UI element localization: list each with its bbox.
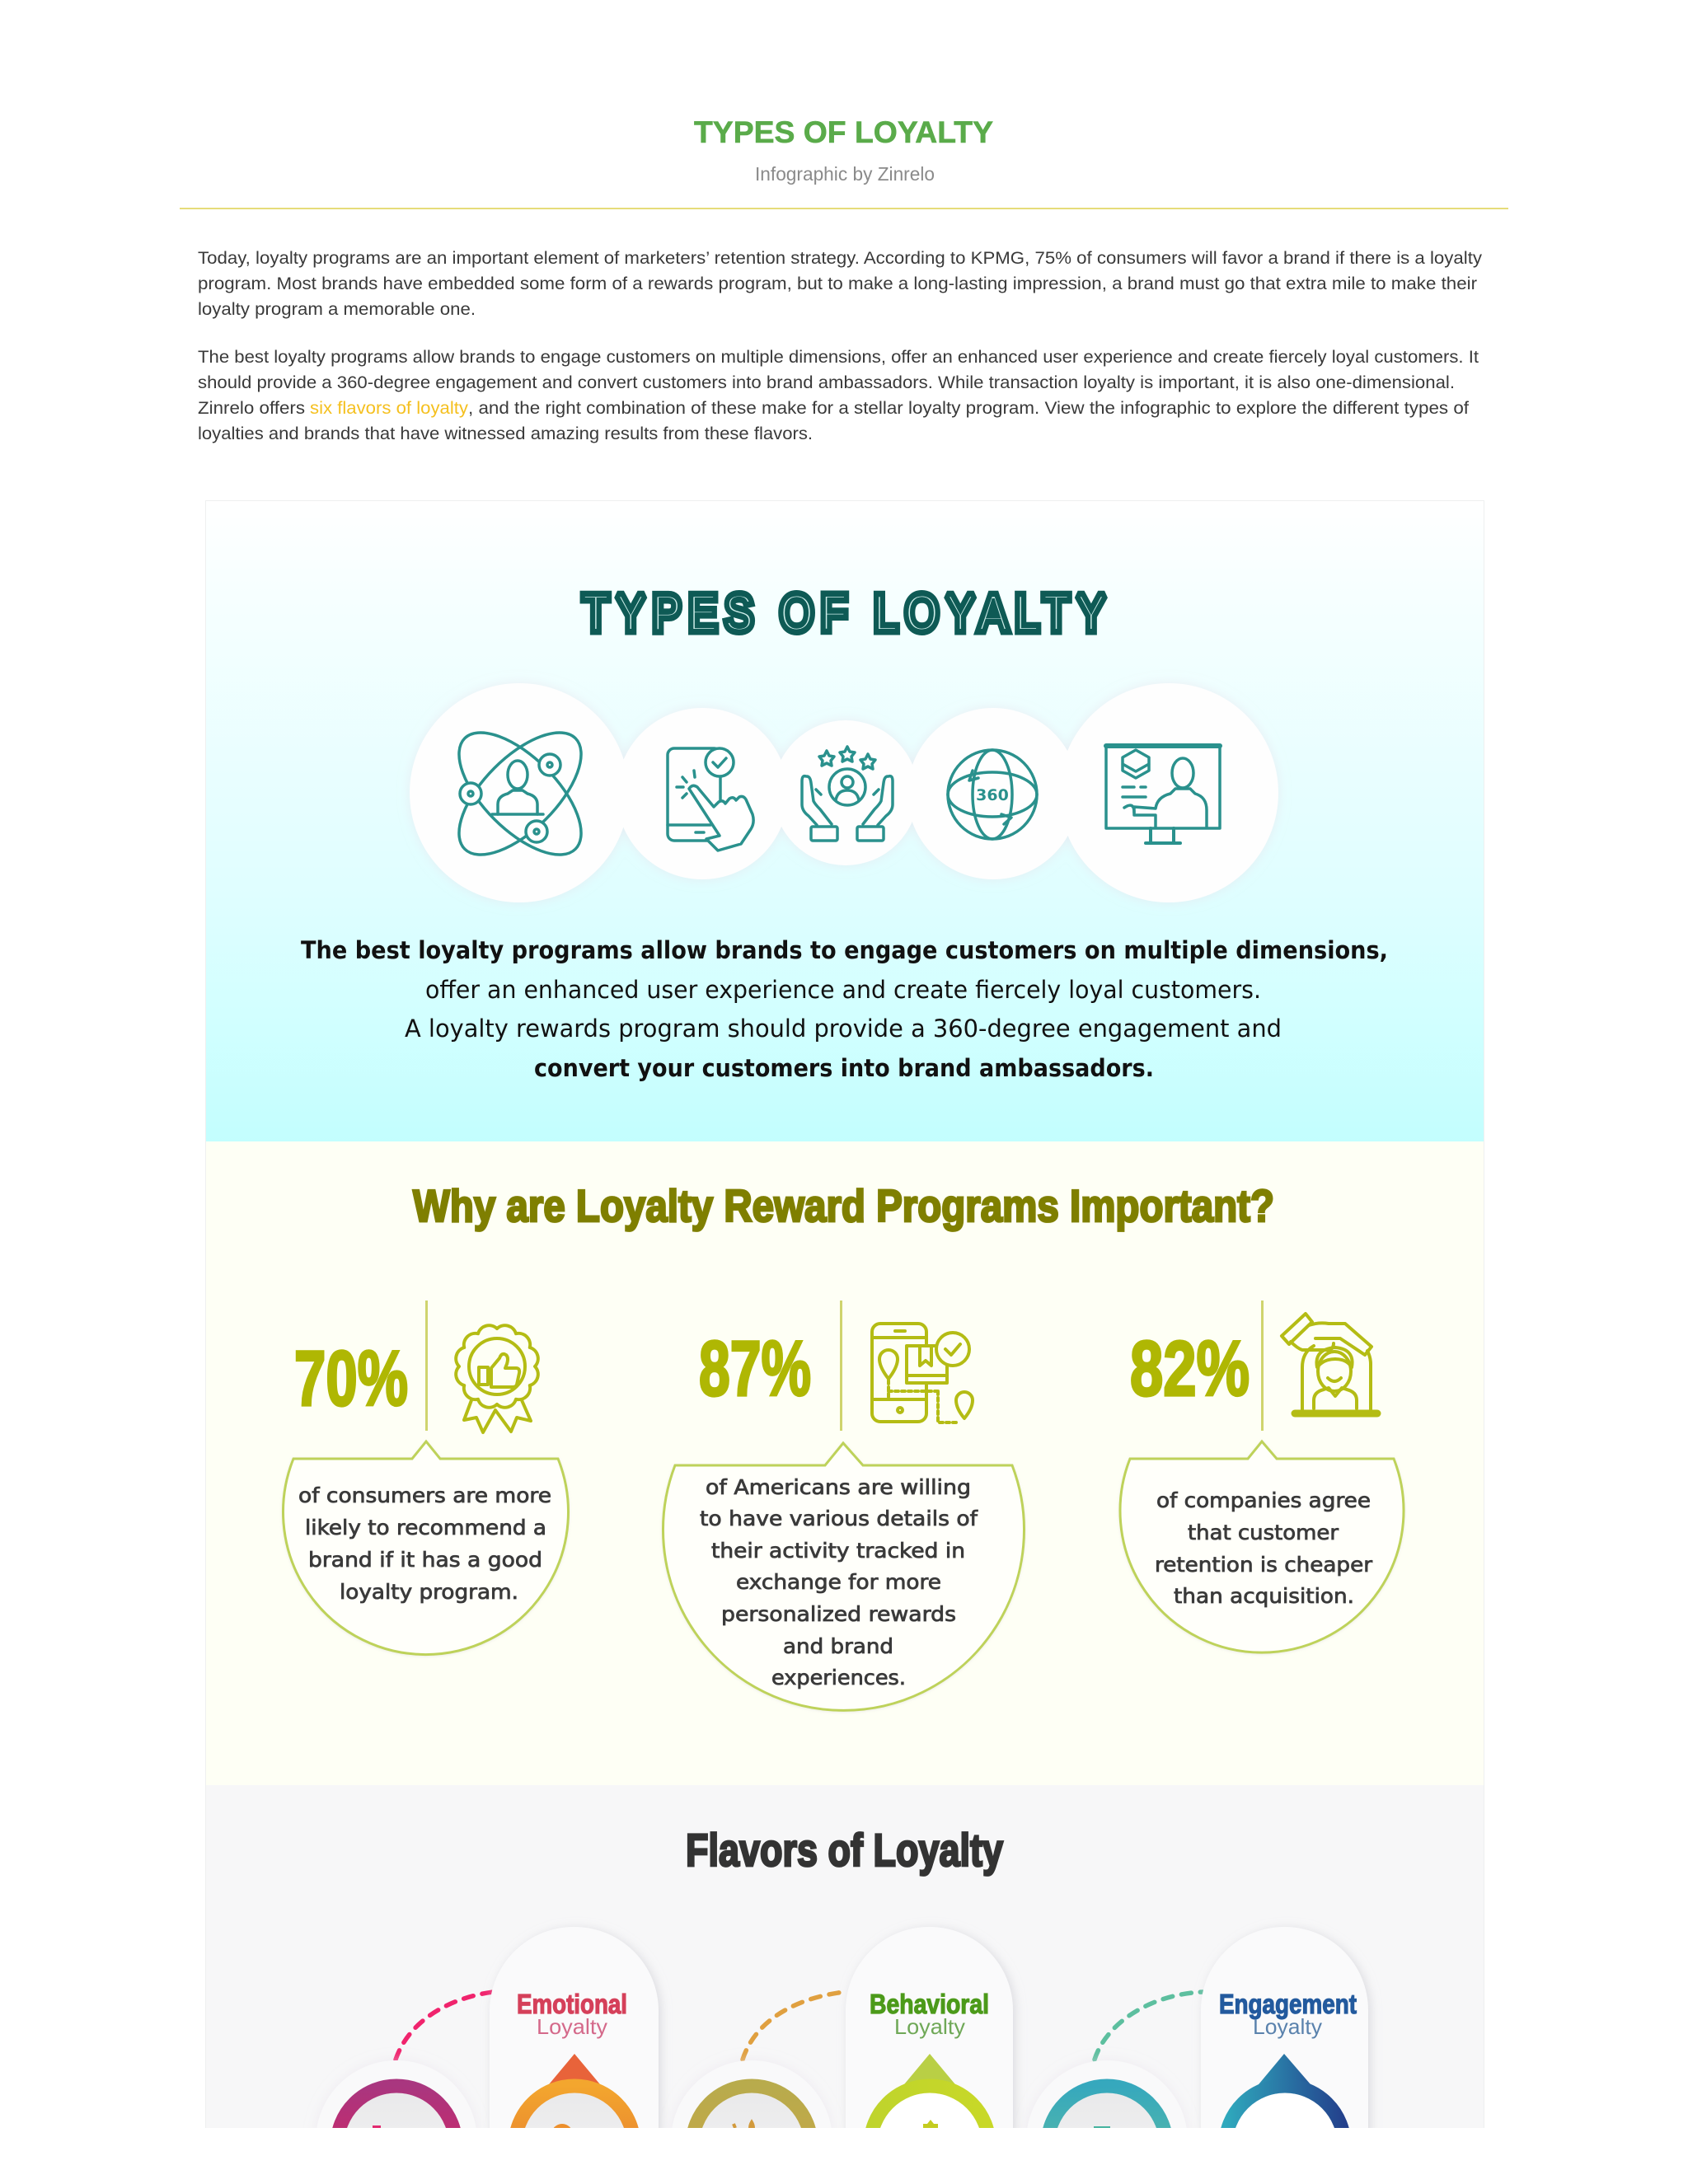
text: best loyalty programs: offer an enhanced user experience and create fiercely loyal customers. — [425, 976, 1261, 1004]
flavor: behavioral loyalty — [687, 1926, 1018, 2128]
callout: americans: exchange for more — [736, 1570, 941, 1594]
intro paragraph 2: , and the right combination of these make for a stellar loyalty program. View the infographic to explore the different types of — [468, 399, 1469, 418]
intro paragraph 2: The best loyalty programs allow brands to engage customers on multiple dimensions, offer an enhanced user experience and create fiercely loyal customers. It — [198, 348, 1479, 367]
callout: companies: than acquisition. — [1174, 1584, 1354, 1608]
flavor: engagement loyalty — [1043, 1926, 1373, 2128]
icon circles row — [410, 683, 1278, 902]
intro paragraph 2: should provide a 360-degree engagement and convert customers into brand ambassadors. While transaction loyalty is important, it is also one-dimensional. — [198, 373, 1455, 392]
heading: types of loyalty: TYPES OF LOYALTY — [583, 585, 1105, 642]
callout: consumers: brand if it has a good — [308, 1548, 542, 1572]
subtitle: Infographic by Zinrelo — [755, 163, 935, 185]
panel: types of loyalty header — [206, 501, 1484, 1142]
flavor: engagement loyalty: Loyalty — [1253, 2014, 1322, 2039]
callout: companies: of companies agree — [1156, 1488, 1371, 1512]
panel: flavors of loyalty — [303, 1831, 1383, 2128]
intro paragraph 2 — [198, 348, 1479, 443]
callout: consumers: likely to recommend a — [305, 1516, 546, 1540]
stat: 87 percent: 87% — [699, 1325, 811, 1413]
stat: 70 percent — [283, 1301, 568, 1655]
flavor: emotional loyalty — [332, 1926, 663, 2128]
icon: monitor with presenter — [1106, 746, 1220, 843]
flavor: emotional loyalty: Emotional — [517, 1989, 627, 2019]
callout: americans: personalized rewards — [721, 1602, 956, 1626]
icon: 360 globe: 360 — [976, 786, 1009, 804]
text: best loyalty programs — [301, 936, 1388, 1082]
intro paragraph 1: loyalty program a memorable one. — [198, 300, 476, 319]
stat: 82 percent: 82% — [1130, 1325, 1250, 1413]
intro paragraph 2: Zinrelo offers — [198, 399, 305, 418]
callout: consumers: of consumers are more — [298, 1483, 551, 1507]
icon: hand protecting customer — [1282, 1314, 1377, 1413]
intro paragraph 1 — [198, 249, 1483, 319]
callout: americans: of Americans are willing — [706, 1475, 971, 1499]
callout: companies: that customer — [1188, 1521, 1339, 1544]
stat: 70 percent: 70% — [294, 1335, 408, 1422]
stat: 82 percent — [1120, 1301, 1404, 1652]
icon: tablet touch — [668, 748, 753, 851]
callout: companies: retention is cheaper — [1155, 1553, 1373, 1577]
callout: americans: and brand — [783, 1634, 893, 1658]
icon: medal thumbs up — [456, 1325, 538, 1432]
flavor: emotional loyalty: Loyalty — [537, 2014, 607, 2039]
intro paragraph 2: six flavors of loyalty — [310, 399, 469, 418]
intro paragraph 1: Today, loyalty programs are an important element of marketers’ retention strategy. According to KPMG, 75% of consumers will favor a brand if there is a loyalty — [198, 249, 1483, 268]
title: TYPES OF LOYALTY — [694, 115, 993, 149]
heading: flavors of loyalty: Flavors of Loyalty — [686, 1824, 1003, 1876]
infographic page — [180, 120, 1508, 2128]
callout: consumers: loyalty program. — [340, 1580, 518, 1604]
flavor: behavioral loyalty: Behavioral — [870, 1989, 989, 2019]
intro paragraph 2: loyalties and brands that have witnessed amazing results from these flavors. — [198, 424, 813, 443]
icon: 360 globe — [948, 750, 1037, 839]
heading: why are loyalty reward programs important: Why are Loyalty Reward Programs Important? — [413, 1180, 1274, 1231]
callout: americans: to have various details of — [700, 1507, 978, 1530]
text: best loyalty programs: The best loyalty programs allow brands to engage customers on multiple dimensions, — [301, 936, 1388, 964]
icon: hands with stars — [802, 747, 893, 841]
intro paragraph 1: program. Most brands have embedded some form of a rewards program, but to make a long-lasting impression, a brand must go that extra mile to make their — [198, 274, 1477, 293]
icon: atom person — [439, 713, 601, 874]
callout: companies — [1120, 1441, 1404, 1652]
flavor: behavioral loyalty: Loyalty — [894, 2014, 965, 2039]
icon: phone with parcel tracking — [872, 1324, 973, 1422]
stat: 87 percent — [663, 1301, 1024, 1710]
heading: types of loyalty: TYPES OF LOYALTY — [583, 585, 1105, 642]
callout: americans: their activity tracked in — [711, 1539, 965, 1563]
text: best loyalty programs: convert your customers into brand ambassadors. — [534, 1054, 1154, 1082]
callout: americans: experiences. — [771, 1666, 906, 1690]
panel: why loyalty programs matter — [206, 1141, 1484, 1785]
callout: consumers — [283, 1441, 568, 1655]
text: best loyalty programs: A loyalty rewards program should provide a 360-degree engagement and — [405, 1015, 1282, 1043]
flavor: engagement loyalty: Engagement — [1219, 1989, 1357, 2019]
callout: americans — [663, 1443, 1024, 1710]
